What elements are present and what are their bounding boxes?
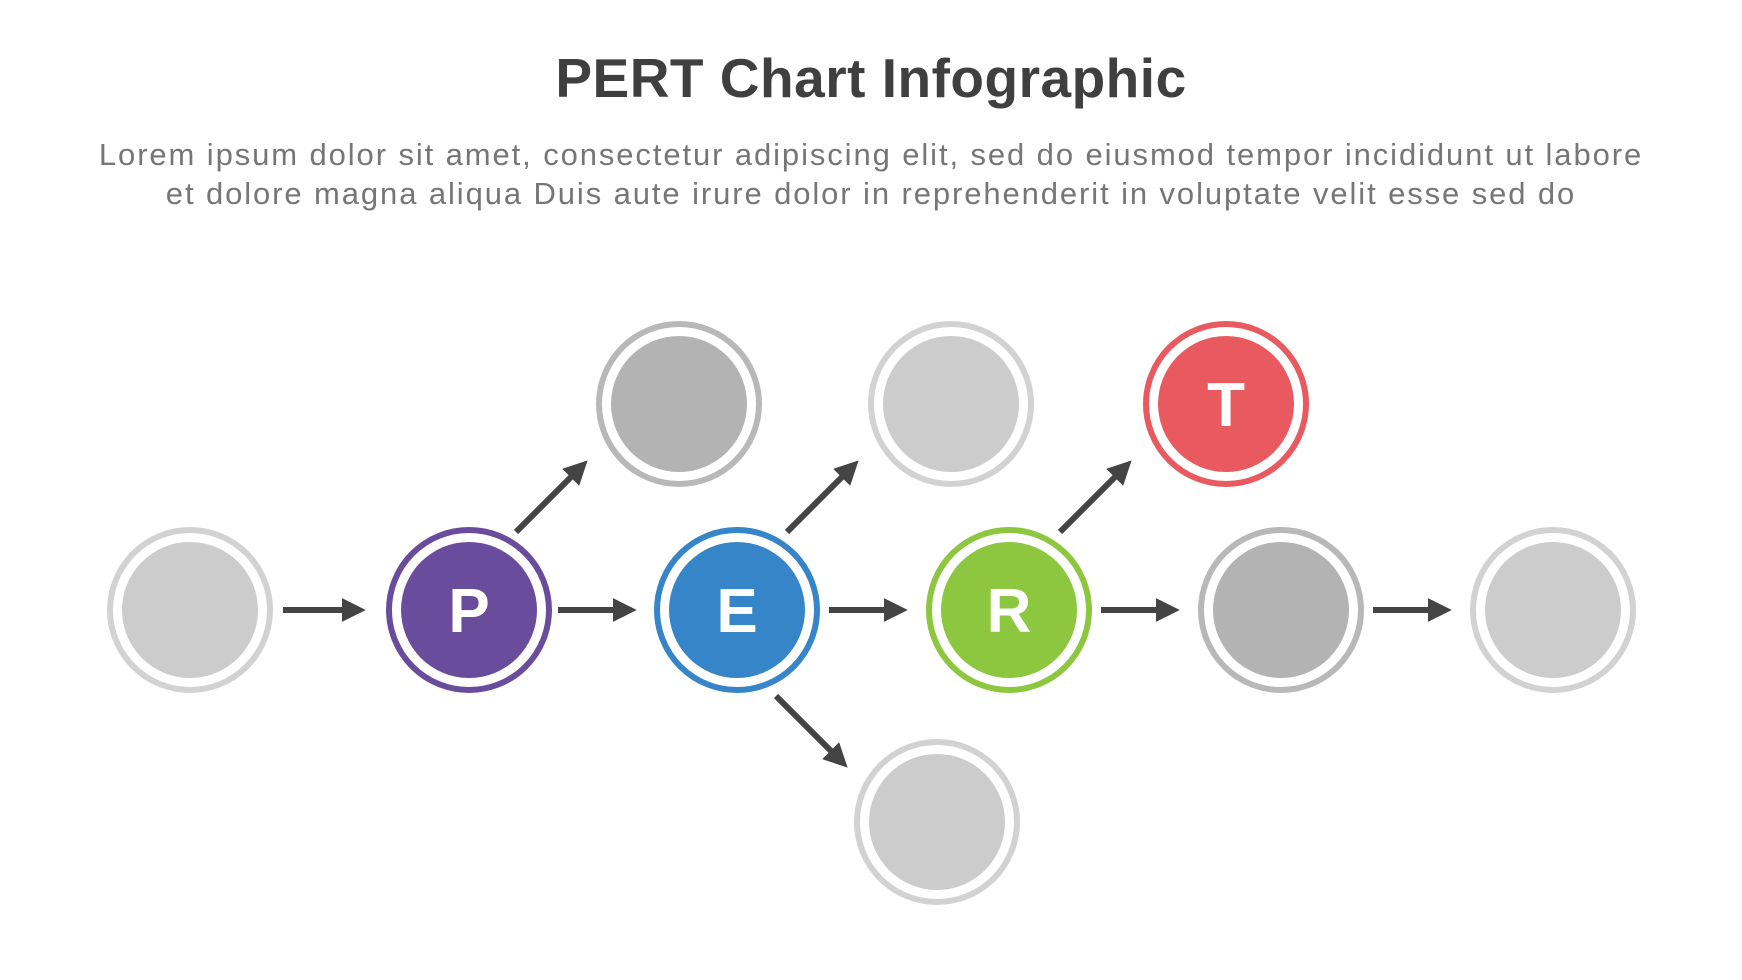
node: E (657, 530, 817, 690)
node: P (389, 530, 549, 690)
node: start (110, 530, 270, 690)
node: R (929, 530, 1089, 690)
node: top 2 (871, 324, 1031, 484)
node: E: E (716, 577, 758, 646)
node: P: P (448, 577, 490, 646)
node: T: T (1207, 371, 1245, 440)
subtitle text: Lorem ipsum dolor sit amet, consectetur adipiscing elit, sed do eiusmod tempor incididunt ut labore (99, 137, 1643, 172)
node: bottom (857, 742, 1017, 902)
title: PERT Chart Infographic (555, 47, 1187, 109)
subtitle text (99, 137, 1643, 211)
node: T (1146, 324, 1306, 484)
node: main 5 (1201, 530, 1361, 690)
node: R: R (987, 577, 1031, 646)
subtitle text: et dolore magna aliqua Duis aute irure dolor in reprehenderit in voluptate velit esse sed do (166, 176, 1576, 211)
node: top 1 (599, 324, 759, 484)
arrows (283, 468, 1441, 760)
node: end (1473, 530, 1633, 690)
